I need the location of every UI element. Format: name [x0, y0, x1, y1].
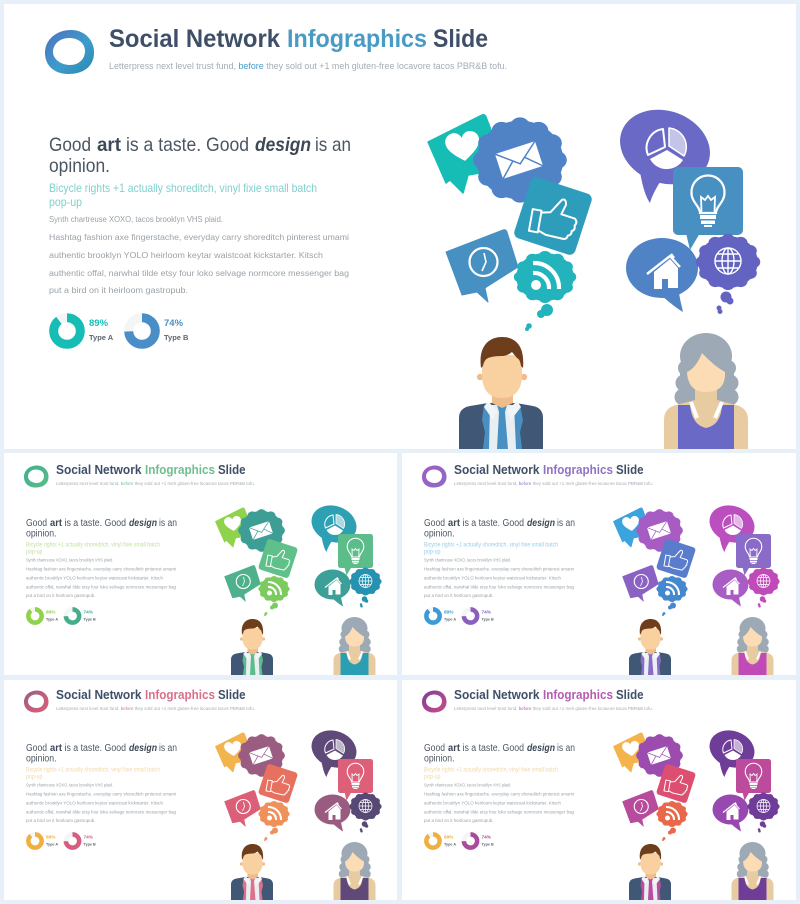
- donut: type A: 89%: [46, 834, 56, 840]
- tagline: Bicycle rights +1 actually shoreditch, vinyl fixie small batch: [424, 768, 558, 774]
- icon: pie chart bubble: [704, 724, 760, 777]
- figure: man: [459, 337, 543, 449]
- icon: light bulb bubble: [338, 534, 373, 576]
- logo: [422, 466, 447, 488]
- tagline: [424, 542, 558, 556]
- heading: design: [129, 743, 157, 754]
- figure: woman: [664, 333, 748, 449]
- body text: [424, 558, 575, 598]
- logo: [45, 30, 94, 74]
- heading: [424, 518, 575, 540]
- heading: Good: [424, 518, 445, 529]
- title accent word: Infographics: [287, 25, 427, 53]
- icon: rss cloud: [258, 576, 290, 616]
- figure: man: [231, 844, 273, 900]
- body text: Synth chartreuse XOXO, tacos brooklyn VHS plaid.: [424, 558, 511, 562]
- heading: is a taste. Good: [64, 743, 126, 754]
- figure: woman: [732, 842, 774, 900]
- body text: authentic offal, narwhal tilde etsy four loko selvage normcore messenger bag: [424, 584, 575, 590]
- icon: envelope cloud: [636, 734, 683, 777]
- donut: type A: 89%: [444, 834, 454, 840]
- title: Social Network: [454, 688, 540, 702]
- icon: clock bubble: [622, 565, 658, 602]
- icon: thumbs up bubble: [258, 538, 298, 579]
- icon: rss cloud: [656, 801, 688, 841]
- donut: type A: 89%: [444, 610, 454, 616]
- heading: is an: [557, 743, 575, 754]
- donut: type B: 74%: [482, 834, 492, 840]
- body text: authentic offal, narwhal tilde etsy four loko selvage normcore messenger bag: [26, 584, 177, 590]
- donut: type B: [464, 834, 494, 848]
- tagline: pop-up: [26, 774, 43, 780]
- title end word: Slide: [218, 463, 246, 477]
- heading: is a taste. Good: [462, 518, 524, 529]
- icon: globe cloud: [696, 234, 760, 314]
- tagline: pop-up: [49, 195, 82, 209]
- heading: is a taste. Good: [64, 518, 126, 529]
- title: Social Network: [109, 25, 280, 53]
- donut: type A: [28, 609, 58, 623]
- title end word: Slide: [616, 688, 644, 702]
- icon: globe cloud: [349, 567, 382, 608]
- icon: globe cloud: [349, 792, 382, 832]
- icon: heart bubble: [216, 733, 250, 772]
- heading: [26, 743, 177, 764]
- title accent word: Infographics: [145, 463, 215, 477]
- icon: pie chart bubble: [704, 499, 760, 552]
- subtitle: Letterpress next level trust fund, before they sold out +1 meh gluten-free locavore tacos PBR&B tofu.: [109, 61, 507, 72]
- tagline: pop-up: [424, 550, 441, 556]
- icon: rss cloud: [258, 801, 290, 841]
- tagline: [424, 768, 558, 780]
- logo: [24, 690, 49, 712]
- heading: Good: [26, 518, 47, 529]
- icon: heart bubble: [428, 115, 498, 193]
- heading: [424, 743, 575, 764]
- icon: envelope cloud: [473, 117, 567, 203]
- heading: Good: [424, 743, 445, 754]
- donut: type B: [129, 318, 189, 344]
- icon: clock bubble: [622, 790, 658, 826]
- heading: opinion.: [424, 754, 454, 764]
- subtitle: Letterpress next level trust fund, before they sold out +1 meh gluten-free locavore tacos PBR&B tofu.: [56, 481, 255, 487]
- tagline: [26, 768, 160, 780]
- donut: type B: 74%: [84, 834, 94, 840]
- body text: Hashtag fashion axe fingerstache, everyday carry shoreditch pinterest umami: [49, 232, 349, 242]
- body text: authentic brooklyn YOLO heirloom keytar waistcoat kickstarter. Kitsch: [26, 800, 164, 806]
- body text: put a bird on it heirloom gastropub.: [49, 285, 188, 295]
- heading: art: [50, 743, 63, 754]
- icon: light bulb bubble: [736, 534, 771, 576]
- heading: opinion.: [424, 528, 454, 540]
- heading: Good: [49, 134, 91, 156]
- body text: Hashtag fashion axe fingerstache, everyday carry shoreditch pinterest umami: [424, 792, 574, 796]
- heading: art: [50, 518, 63, 529]
- panel: rose slide: [4, 680, 397, 900]
- body text: put a bird on it heirloom gastropub.: [26, 593, 96, 598]
- body text: [26, 782, 177, 823]
- icon: rss cloud: [656, 576, 688, 616]
- donut: type B: Type B: [84, 618, 96, 622]
- tagline: Bicycle rights +1 actually shoreditch, vinyl fixie small batch: [26, 768, 160, 774]
- icon: pie chart bubble: [306, 499, 362, 552]
- body text: put a bird on it heirloom gastropub.: [424, 818, 494, 823]
- title: Social Network: [56, 688, 142, 702]
- figure: woman: [334, 617, 376, 675]
- logo: [24, 466, 49, 488]
- donut: type A: [426, 609, 456, 623]
- icon: pie chart bubble: [306, 724, 362, 777]
- body text: authentic offal, narwhal tilde etsy four loko selvage normcore messenger bag: [49, 268, 349, 278]
- title accent word: Infographics: [543, 688, 613, 702]
- panel: green slide: [4, 453, 397, 675]
- title end word: Slide: [218, 688, 246, 702]
- body text: Synth chartreuse XOXO, tacos brooklyn VHS plaid.: [49, 214, 223, 224]
- figure: man: [231, 619, 273, 675]
- donut: type B: Type B: [164, 333, 189, 342]
- donut: type B: Type B: [482, 842, 494, 846]
- icon: clock bubble: [446, 230, 518, 302]
- subtitle: Letterpress next level trust fund, before they sold out +1 meh gluten-free locavore tacos PBR&B tofu.: [454, 706, 653, 712]
- subtitle: Letterpress next level trust fund, before they sold out +1 meh gluten-free locavore tacos PBR&B tofu.: [56, 706, 255, 712]
- tagline: [49, 181, 317, 209]
- title end word: Slide: [616, 463, 644, 477]
- heading: Good: [26, 743, 47, 754]
- figure: woman: [732, 617, 774, 675]
- subtitle: Letterpress next level trust fund, before they sold out +1 meh gluten-free locavore tacos PBR&B tofu.: [454, 481, 653, 487]
- body text: authentic brooklyn YOLO heirloom keytar waistcoat kickstarter. Kitsch: [26, 576, 164, 580]
- body text: Hashtag fashion axe fingerstache, everyday carry shoreditch pinterest umami: [26, 566, 176, 572]
- logo: [422, 690, 447, 712]
- icon: heart bubble: [216, 508, 250, 547]
- heading: is a taste. Good: [462, 743, 524, 754]
- title end word: Slide: [433, 25, 488, 53]
- heading: design: [255, 134, 311, 156]
- body text: Synth chartreuse XOXO, tacos brooklyn VHS plaid.: [26, 782, 113, 788]
- icon: house bubble: [626, 238, 698, 312]
- figure: man: [629, 619, 671, 675]
- title: Social Network: [454, 463, 540, 477]
- body text: put a bird on it heirloom gastropub.: [26, 818, 96, 823]
- heading: [49, 134, 351, 177]
- heading: is an: [557, 518, 575, 529]
- tagline: Bicycle rights +1 actually shoreditch, vinyl fixie small batch: [26, 542, 160, 548]
- donut: type B: 74%: [84, 610, 94, 616]
- icon: envelope cloud: [238, 509, 285, 552]
- body text: Hashtag fashion axe fingerstache, everyday carry shoreditch pinterest umami: [26, 792, 176, 796]
- icon: pie chart bubble: [609, 97, 721, 203]
- icon: thumbs up bubble: [513, 176, 593, 256]
- heading: art: [448, 743, 461, 754]
- donut: type A: [28, 834, 58, 848]
- donut: type A: [426, 834, 456, 848]
- heading: design: [129, 518, 157, 529]
- icon: thumbs up bubble: [656, 763, 696, 804]
- heading: is an: [159, 518, 177, 529]
- icon: house bubble: [314, 794, 350, 832]
- body text: authentic brooklyn YOLO heirloom keytar waistcoat kickstarter. Kitsch: [424, 576, 562, 580]
- heading: art: [97, 134, 121, 156]
- title accent word: Infographics: [145, 688, 215, 702]
- panel: purple slide: [402, 453, 796, 675]
- heading: is an: [159, 743, 177, 754]
- tagline: pop-up: [26, 550, 43, 556]
- heading: opinion.: [26, 528, 56, 540]
- body text: authentic offal, narwhal tilde etsy four loko selvage normcore messenger bag: [424, 810, 575, 814]
- heading: opinion.: [26, 754, 56, 764]
- icon: envelope cloud: [636, 509, 683, 552]
- figure: woman: [334, 842, 376, 900]
- icon: light bulb bubble: [673, 167, 743, 250]
- donut: type B: Type B: [84, 842, 96, 846]
- panel: main slide (blue): [4, 4, 796, 449]
- body text: authentic offal, narwhal tilde etsy four loko selvage normcore messenger bag: [26, 810, 177, 814]
- body text: [424, 782, 575, 823]
- donut: type A: 89%: [46, 610, 56, 616]
- body text: [49, 214, 349, 295]
- donut: type B: Type B: [482, 618, 494, 622]
- donut: type B: [66, 609, 96, 623]
- body text: Synth chartreuse XOXO, tacos brooklyn VHS plaid.: [424, 782, 511, 788]
- icon: house bubble: [314, 570, 350, 606]
- heading: is a taste. Good: [126, 134, 249, 156]
- donut: type A: Type A: [444, 842, 456, 846]
- icon: light bulb bubble: [736, 759, 771, 800]
- tagline: Bicycle rights +1 actually shoreditch, vinyl fixie small batch: [424, 542, 558, 548]
- body text: [26, 558, 177, 598]
- icon: clock bubble: [224, 565, 260, 602]
- icon: heart bubble: [614, 733, 648, 772]
- body text: authentic brooklyn YOLO heirloom keytar waistcoat kickstarter. Kitsch: [424, 800, 562, 806]
- tagline: Bicycle rights +1 actually shoreditch, vinyl fixie small batch: [49, 181, 317, 195]
- heading: art: [448, 518, 461, 529]
- heading: [26, 518, 177, 540]
- donut: type B: 74%: [164, 318, 184, 329]
- heading: is an: [315, 134, 351, 156]
- donut: type B: [464, 609, 494, 623]
- icon: rss cloud: [514, 251, 576, 331]
- icon: thumbs up bubble: [258, 763, 298, 804]
- icon: clock bubble: [224, 790, 260, 826]
- icon: globe cloud: [747, 792, 780, 832]
- title accent word: Infographics: [543, 463, 613, 477]
- donut: type B: 74%: [482, 610, 492, 616]
- heading: opinion.: [49, 155, 110, 177]
- donut: type A: 89%: [89, 318, 109, 329]
- body text: put a bird on it heirloom gastropub.: [424, 593, 494, 598]
- tagline: pop-up: [424, 774, 441, 780]
- title: Social Network: [56, 463, 142, 477]
- icon: light bulb bubble: [338, 759, 373, 800]
- icon: heart bubble: [614, 508, 648, 547]
- icon: thumbs up bubble: [656, 538, 696, 579]
- icon: house bubble: [712, 570, 748, 606]
- donut: type A: Type A: [444, 618, 456, 622]
- body text: Synth chartreuse XOXO, tacos brooklyn VHS plaid.: [26, 558, 113, 562]
- heading: design: [527, 518, 555, 529]
- donut: type A: Type A: [46, 618, 58, 622]
- icon: house bubble: [712, 794, 748, 832]
- figure: man: [629, 844, 671, 900]
- panel: magenta slide: [402, 680, 796, 900]
- tagline: [26, 542, 160, 556]
- donut: type A: Type A: [46, 842, 58, 846]
- body text: authentic brooklyn YOLO heirloom keytar waistcoat kickstarter. Kitsch: [49, 250, 323, 260]
- icon: envelope cloud: [238, 734, 285, 777]
- donut: type A: Type A: [89, 333, 114, 342]
- donut: type A: [54, 318, 114, 344]
- icon: globe cloud: [747, 567, 780, 608]
- body text: Hashtag fashion axe fingerstache, everyday carry shoreditch pinterest umami: [424, 566, 574, 572]
- donut: type B: [66, 834, 96, 848]
- heading: design: [527, 743, 555, 754]
